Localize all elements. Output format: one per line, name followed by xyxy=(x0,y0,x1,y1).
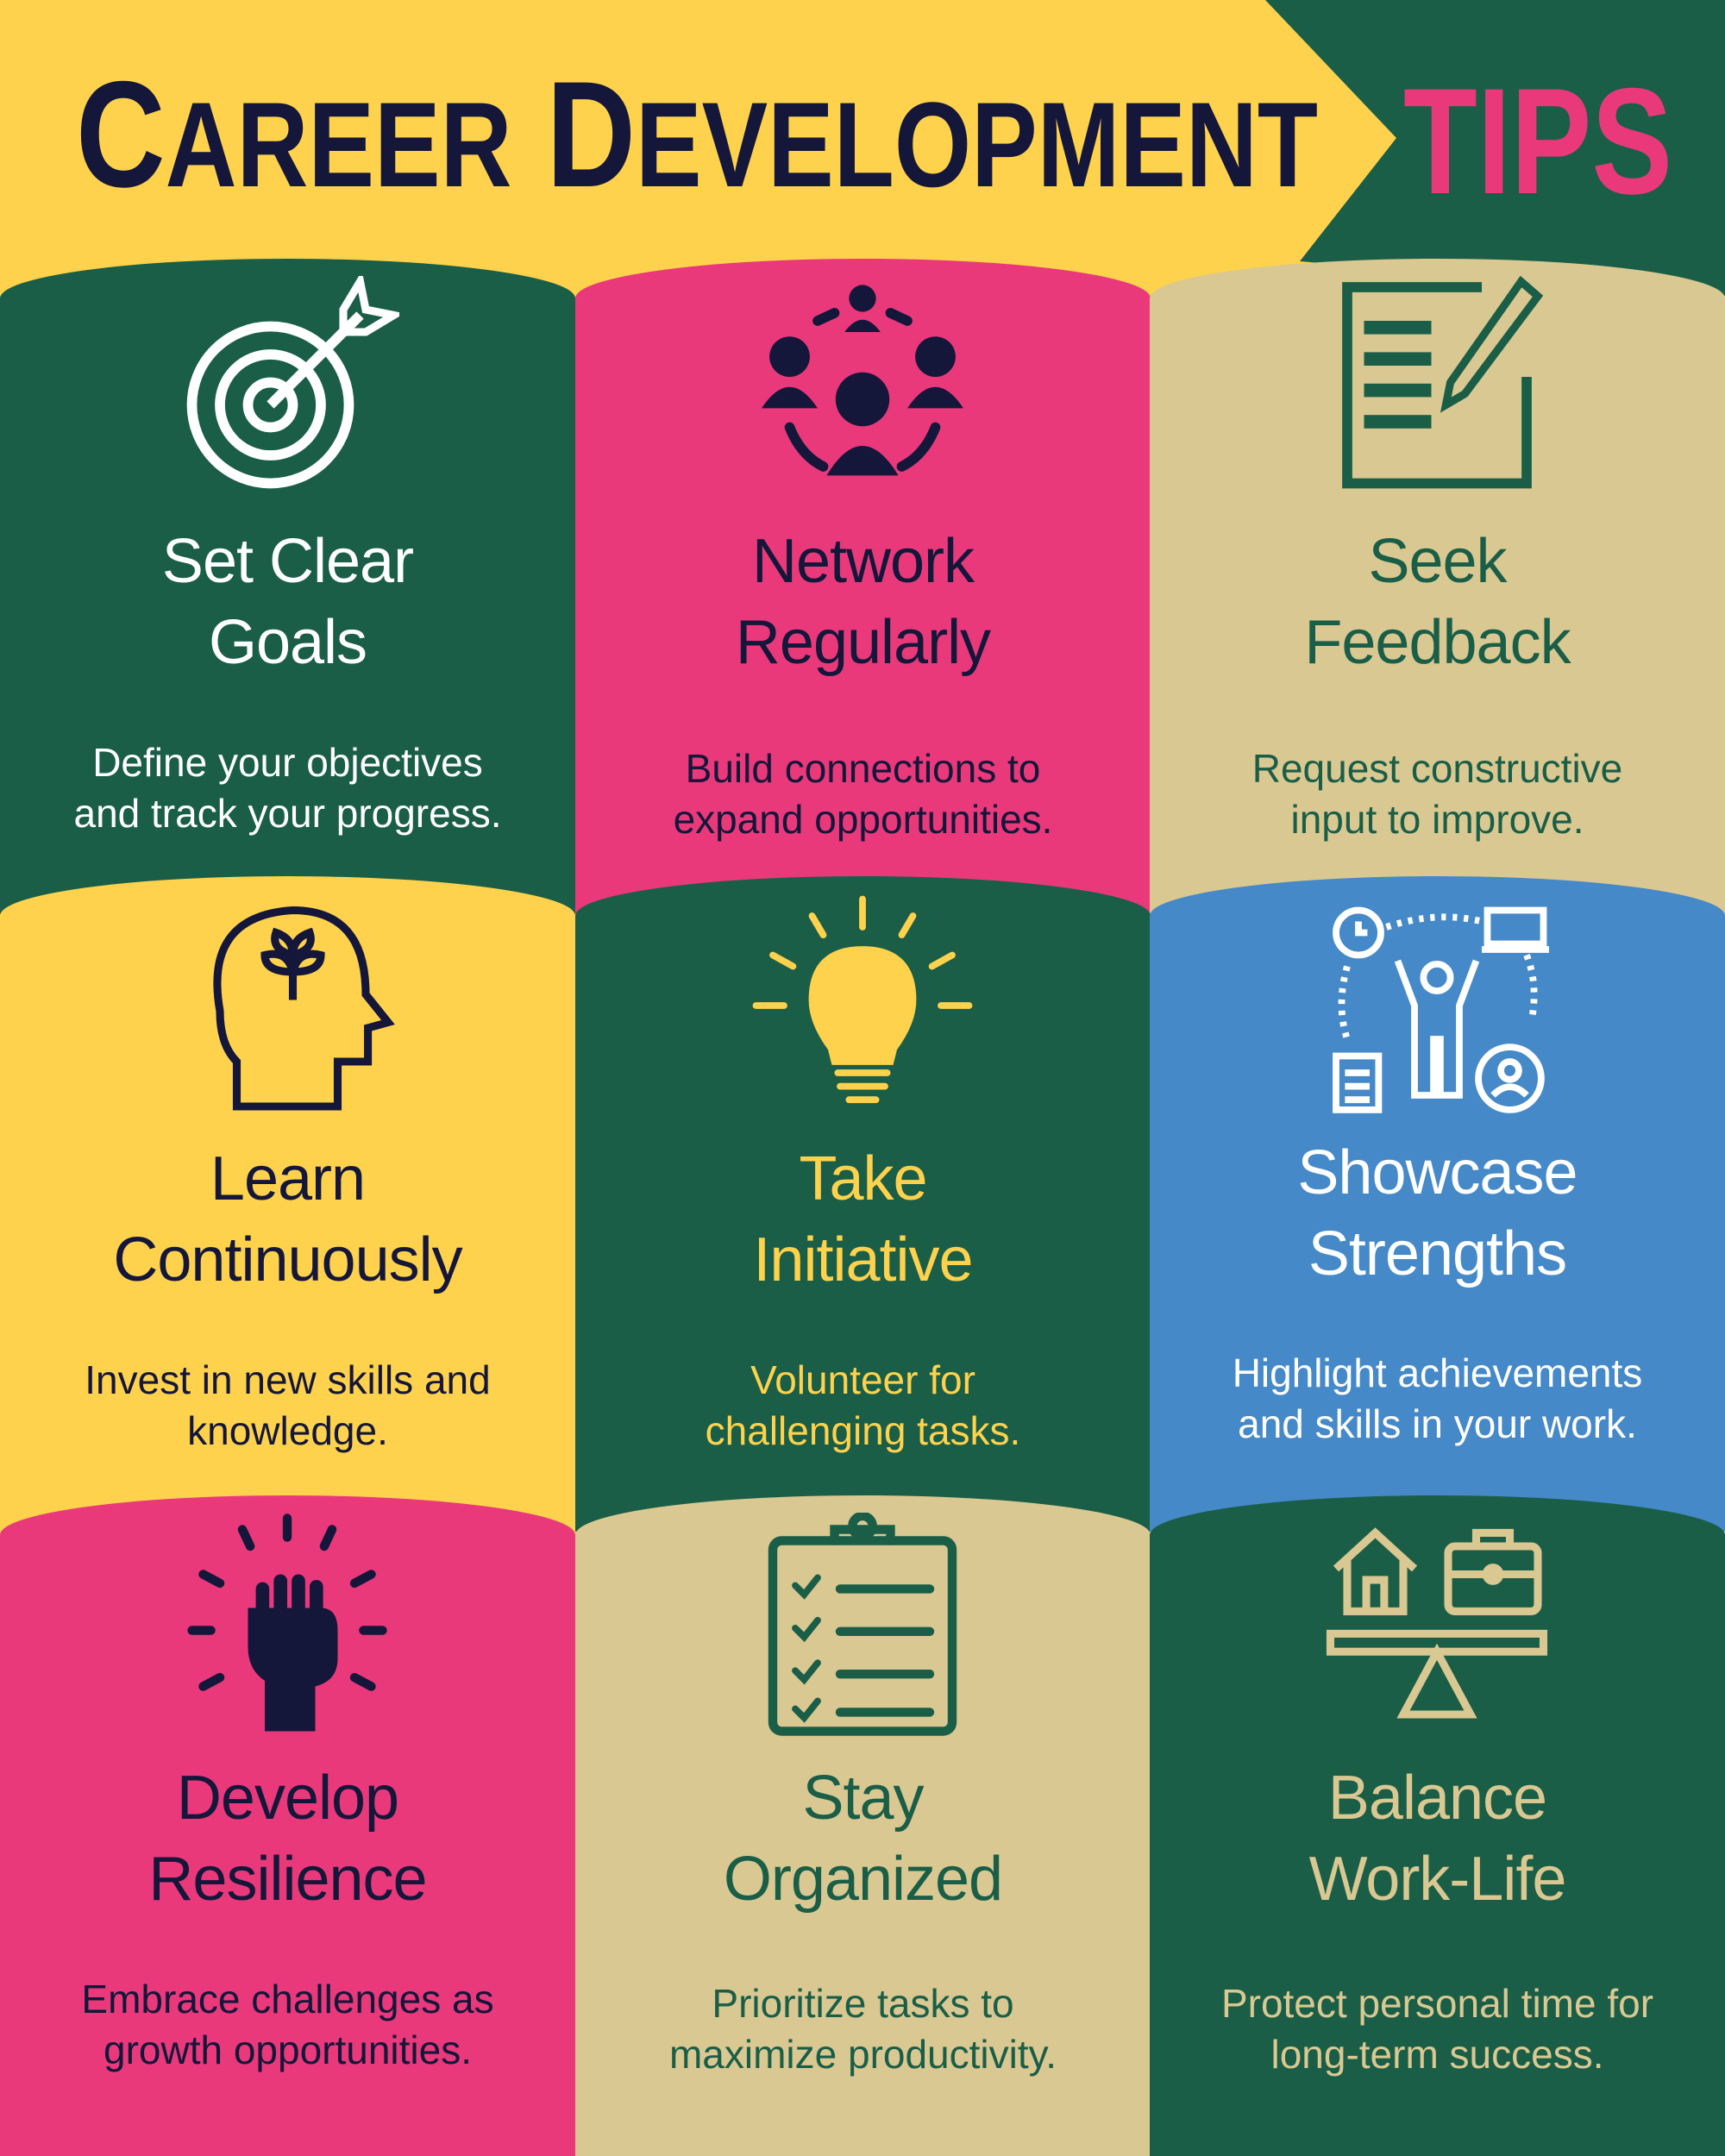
panel: learn continuously xyxy=(0,876,575,1532)
panel: balance work-life xyxy=(1150,1495,1725,2156)
icon: person with achievements xyxy=(1333,907,1549,1113)
title: Network xyxy=(752,527,974,596)
icon: people network xyxy=(762,285,963,476)
icon: raised fist xyxy=(187,1514,387,1732)
title xyxy=(736,527,991,677)
title xyxy=(113,1144,462,1294)
description xyxy=(73,740,502,836)
panel: stay organized xyxy=(575,1495,1151,2156)
title: Seek xyxy=(1368,527,1507,596)
description: growth opportunities. xyxy=(104,2028,472,2072)
description: input to improve. xyxy=(1290,797,1584,842)
panel: network regularly xyxy=(575,259,1151,914)
panel: develop resilience xyxy=(0,1495,575,2156)
description: and track your progress. xyxy=(73,791,502,836)
description: long-term success. xyxy=(1270,2032,1604,2077)
title: CAREER DEVELOPMENT xyxy=(76,51,1318,219)
title: Balance xyxy=(1328,1764,1546,1833)
description: and skills in your work. xyxy=(1238,1401,1637,1446)
title xyxy=(753,1144,973,1294)
icon: document with pen xyxy=(1342,276,1544,488)
description xyxy=(706,1357,1020,1453)
title xyxy=(724,1764,1002,1914)
title xyxy=(1297,1138,1578,1288)
title: Goals xyxy=(209,608,367,677)
title: Continuously xyxy=(113,1225,462,1294)
description: expand opportunities. xyxy=(674,797,1052,842)
description: Embrace challenges as xyxy=(81,1977,494,2021)
title xyxy=(1309,1764,1565,1914)
title: Initiative xyxy=(753,1225,973,1294)
icon: light bulb xyxy=(752,895,973,1104)
title: Take xyxy=(799,1144,927,1213)
panel: take initiative xyxy=(575,876,1151,1532)
description: knowledge. xyxy=(187,1408,388,1453)
description xyxy=(669,1981,1057,2077)
title: Learn xyxy=(210,1144,365,1213)
panel: seek feedback xyxy=(1150,259,1725,914)
description: maximize productivity. xyxy=(669,2032,1057,2077)
description: Prioritize tasks to xyxy=(712,1981,1014,2026)
title: Feedback xyxy=(1304,608,1571,677)
panel: set clear goals xyxy=(0,259,575,914)
icon: clipboard checklist xyxy=(768,1513,957,1736)
title: Resilience xyxy=(148,1845,427,1914)
title: Strengths xyxy=(1308,1219,1566,1288)
panel: showcase strengths xyxy=(1150,876,1725,1532)
description xyxy=(674,746,1052,842)
description xyxy=(1233,1351,1642,1446)
description xyxy=(1252,746,1622,842)
title: Organized xyxy=(724,1845,1002,1914)
title: Regularly xyxy=(736,608,990,677)
description: Invest in new skills and xyxy=(85,1357,491,1402)
description: Build connections to xyxy=(686,746,1040,791)
description xyxy=(85,1357,491,1453)
title: Work-Life xyxy=(1309,1845,1565,1914)
header green corner xyxy=(1265,0,1725,296)
title xyxy=(148,1764,427,1914)
title: Set Clear xyxy=(162,527,413,596)
icon: head with plant xyxy=(213,906,395,1111)
title: Develop xyxy=(177,1764,398,1833)
description xyxy=(81,1977,494,2072)
description: Request constructive xyxy=(1252,746,1622,791)
icon: balance house briefcase xyxy=(1327,1527,1547,1718)
icon: target xyxy=(186,276,399,488)
title: Stay xyxy=(802,1764,924,1833)
description: Volunteer for xyxy=(750,1357,975,1402)
description: Define your objectives xyxy=(92,740,483,785)
title xyxy=(1304,527,1571,677)
description: Protect personal time for xyxy=(1221,1981,1653,2026)
title xyxy=(162,527,413,677)
description: challenging tasks. xyxy=(706,1408,1020,1453)
title: Showcase xyxy=(1297,1138,1578,1207)
description: Highlight achievements xyxy=(1233,1351,1642,1395)
description xyxy=(1221,1981,1653,2077)
